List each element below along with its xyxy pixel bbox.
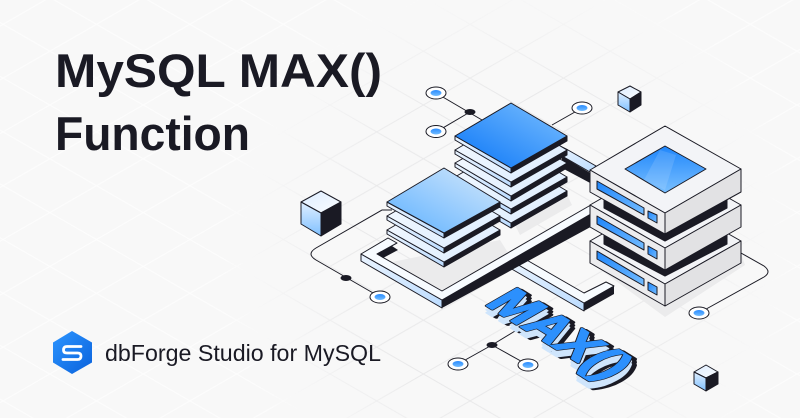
pipe: branch to the right [510, 255, 614, 311]
title: MySQL MAX() [55, 44, 382, 97]
stack: front plates [387, 168, 500, 267]
connector lines [311, 93, 768, 365]
server unit 2 [590, 162, 741, 270]
plate 3 [455, 131, 567, 201]
brand name: dbForge Studio for MySQL [105, 340, 381, 366]
plate 2 [387, 183, 500, 253]
node: left [370, 291, 390, 303]
plate 1 light blue [387, 168, 500, 238]
server gap shadow 2 [604, 234, 727, 276]
cube: bottom right [694, 365, 718, 391]
floor shadows [392, 195, 745, 317]
icon: dbForge hexagon logo [53, 331, 92, 374]
junction dots [340, 109, 498, 348]
cube: top right [618, 86, 641, 112]
MAX() 3D lettering: MAX() [475, 281, 647, 386]
node: bottom left [448, 358, 468, 370]
plate 4 [455, 144, 567, 214]
plate 1 blue [455, 103, 567, 173]
pipe: main L shape [361, 202, 596, 308]
server unit 3 [590, 198, 741, 306]
node: top left lower [426, 126, 446, 138]
server gap shadow 1 [604, 200, 727, 241]
title: Function [55, 107, 250, 160]
node: bottom middle [518, 359, 538, 371]
MAX() 3D lettering: MAX() [479, 283, 651, 388]
plate 3 [387, 197, 500, 267]
MAX() 3D lettering: MAX() [475, 288, 647, 393]
MAX() 3D lettering: MAX() [475, 285, 647, 390]
stack: rear plates [455, 103, 567, 228]
pipes [361, 146, 614, 311]
node: top left upper [426, 87, 446, 99]
pipe: upper link to server [560, 146, 596, 184]
server unit 1 [590, 126, 741, 234]
server [590, 126, 741, 306]
cube: left [301, 191, 341, 236]
title [55, 44, 382, 160]
plate 2 [455, 117, 567, 187]
node: bottom right [689, 307, 709, 319]
MAX() 3D lettering: MAX() [479, 286, 651, 391]
MAX() 3D lettering: MAX() [475, 281, 647, 386]
MAX() 3D lettering: MAX() [479, 289, 651, 394]
node: top right [572, 102, 592, 114]
plate 5 [455, 158, 567, 228]
